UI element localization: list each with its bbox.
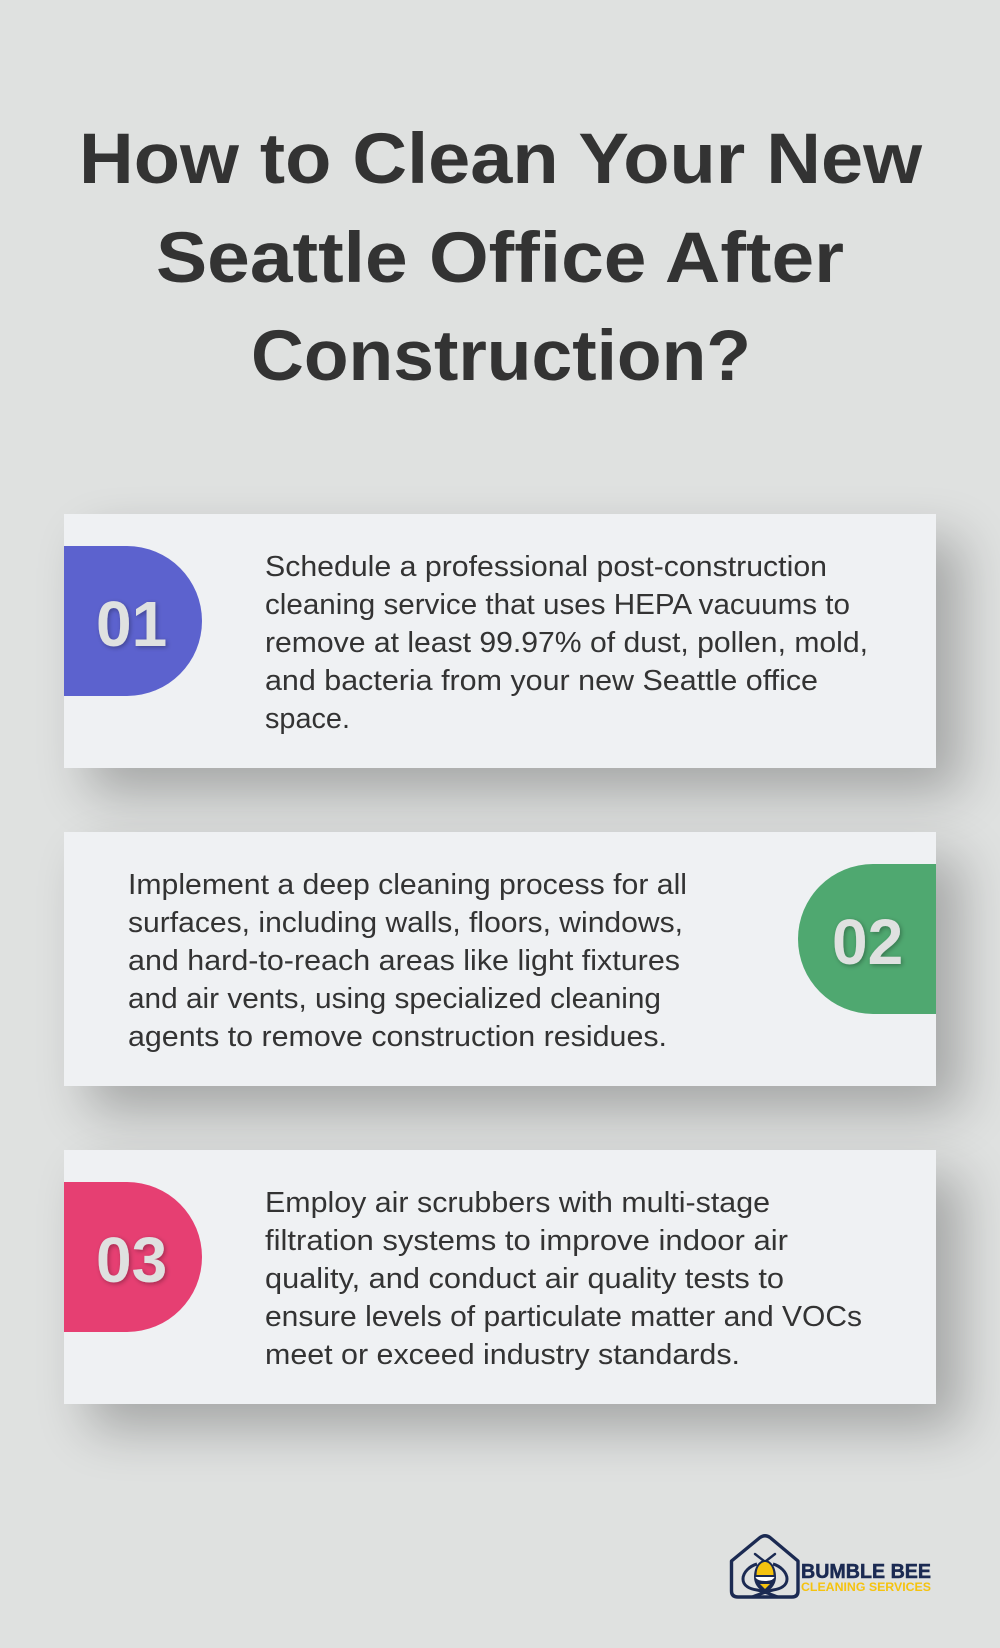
title: How to Clean Your New [79,120,923,199]
panel: step 3 [64,1150,961,1429]
panel: step 1 [64,514,961,793]
step 2 text: Implement a deep cleaning process for all [128,869,687,901]
icon: house with bee [732,1536,798,1597]
logo: Bumble Bee Cleaning Services [732,1536,931,1597]
step 3 text: meet or exceed industry standards. [265,1339,740,1371]
title [79,120,923,396]
step 2 text: and air vents, using specialized cleaning [128,983,661,1015]
step 1 text: Schedule a professional post-construction [265,551,827,583]
number badge 02 [798,864,936,1014]
step 3 text: quality, and conduct air quality tests to [265,1263,784,1295]
step 2 text [128,869,687,1053]
step 2 text: and hard-to-reach areas like light fixtures [128,945,680,977]
step 3 text: Employ air scrubbers with multi-stage [265,1187,770,1219]
brand tagline: CLEANING SERVICES [801,1580,931,1594]
step 2 text: surfaces, including walls, floors, windows, [128,907,683,939]
number badge 01: 01 [96,588,167,660]
panel: step 2 [64,832,961,1111]
number badge 01 [64,546,202,696]
title: Seattle Office After [156,219,844,298]
step 1 text [265,551,868,735]
step 3 text [265,1187,862,1371]
step 1 text: and bacteria from your new Seattle office [265,665,818,697]
step 2 text: agents to remove construction residues. [128,1021,667,1053]
title: Construction? [251,317,751,396]
step 3 text: filtration systems to improve indoor air [265,1225,788,1257]
step 1 text: cleaning service that uses HEPA vacuums to [265,589,850,621]
number badge 02: 02 [832,906,903,978]
number badge 03 [64,1182,202,1332]
brand name: BUMBLE BEE [801,1561,931,1583]
step 3 text: ensure levels of particulate matter and VOCs [265,1301,862,1333]
step 1 text: space. [265,703,350,735]
step 1 text: remove at least 99.97% of dust, pollen, mold, [265,627,868,659]
number badge 03: 03 [96,1224,167,1296]
